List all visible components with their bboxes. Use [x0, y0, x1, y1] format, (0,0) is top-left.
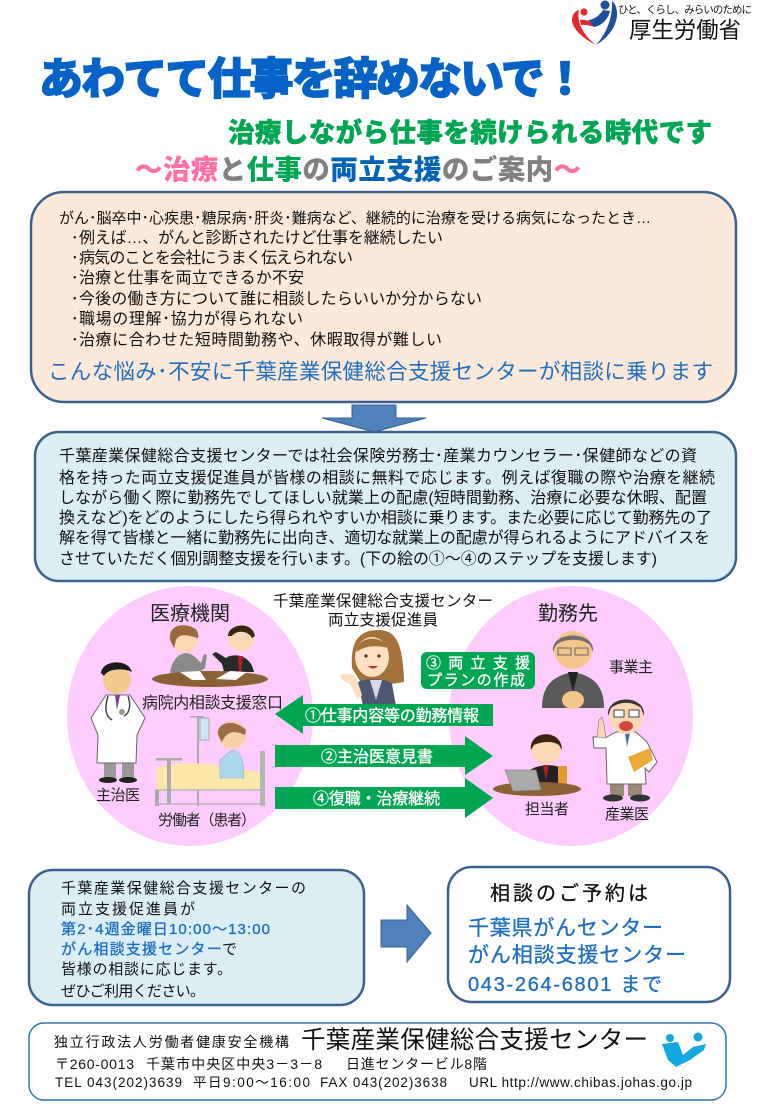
subtitle guide: 〜治療と仕事の両立支援のご案内〜 [135, 154, 581, 185]
worries list: ･ [71, 332, 79, 349]
panel: consultation schedule: がん相談支援センターで [61, 941, 237, 958]
box 3: plan creation: プランの作成 [427, 672, 525, 689]
footer organisation: 独立行政法人労働者健康安全機構 [54, 1034, 289, 1050]
panel: consultation schedule [29, 870, 364, 1005]
worries list: ･ [71, 311, 79, 328]
footer address: 千葉市中央区中央3－3－8 [146, 1056, 322, 1072]
illustration: staff at desk [493, 734, 581, 796]
panel: support description: 千葉産業保健総合支援センターでは社会保険労務士･産業カウンセラー･保健師などの資 [59, 447, 697, 465]
footer phone and url [55, 1075, 692, 1090]
illustration: employer [542, 631, 604, 709]
worries list: 治療と仕事を両立できるか不安 [79, 269, 304, 287]
worries list: ･ [71, 270, 79, 287]
worries list: ･ [71, 250, 79, 267]
worries conclusion: こんな悩み･不安に千葉産業保健総合支援センターが相談に乗ります [48, 360, 713, 384]
label: attending doctor: 主治医 [96, 787, 140, 804]
footer phone and url: TEL 043(202)3639 [55, 1075, 182, 1090]
panel: consultation schedule: ぜひご利用ください。 [61, 983, 205, 1000]
panel: support description: 換えなど)をどのようにしたら得られやすいか相談に乗ります。また必要に応じて勤務先の了 [59, 509, 712, 527]
illustration: occupational physician [593, 700, 657, 802]
panel: support description [35, 432, 736, 581]
arrow: right [381, 905, 431, 962]
footer center name: 千葉産業保健総合支援センター [301, 1026, 648, 1054]
worries intro: がん･脳卒中･心疾患･糖尿病･肝炎･難病など、継続的に治療を受ける病気になったとき… [59, 210, 651, 227]
worries list: ･ [71, 230, 79, 247]
subtitle green: 治療しながら仕事を続けられる時代です [228, 118, 712, 148]
footer phone and url: FAX 043(202)3638 [320, 1075, 447, 1090]
worries list: 職場の理解･協力が得られない [79, 310, 303, 328]
label: medical institution: 医療機関 [150, 602, 230, 625]
worries list [71, 229, 482, 349]
arrow: down [322, 405, 426, 432]
footer address: 〒260-0013 [55, 1056, 134, 1072]
title: あわてて仕事を辞めないで！ [39, 55, 587, 104]
worries list: ･ [71, 291, 79, 308]
circle: workplace [449, 586, 693, 846]
label: worker patient: 労働者（患者） [158, 812, 256, 829]
arrow 4: return to work [275, 778, 493, 818]
panel: consultation schedule: 第2･4週金曜日10:00～13:00 [61, 921, 270, 938]
panel: support description: 解を得て皆様と一緒に勤務先に出向き、適切な就業上の配慮が得られるようにアドバイスを [59, 529, 710, 547]
reservation contact: 千葉県がんセンター [468, 917, 663, 940]
reservation contact: がん相談支援センター [468, 944, 686, 967]
label: support promoter: 両立支援促進員 [328, 611, 438, 629]
icon: center logo [662, 1032, 706, 1067]
label: workplace: 勤務先 [538, 602, 598, 625]
footer phone and url: URL http://www.chibas.johas.go.jp [469, 1075, 692, 1090]
panel: worries [31, 192, 736, 402]
panel: reservation [448, 867, 730, 1002]
reservation heading: 相談のご予約は [490, 882, 648, 905]
label: support promoter: 千葉産業保健総合支援センター [273, 592, 493, 610]
label: support promoter [273, 592, 493, 629]
illustration: patient in bed [155, 716, 265, 806]
arrow 4: return to work: ④復職・治療継続 [313, 790, 440, 808]
header logo: ministry [572, 0, 752, 45]
panel: consultation schedule: 両立支援促進員が [61, 901, 195, 918]
footer address: 日進センタービル8階 [346, 1056, 487, 1072]
illustration: attending doctor [91, 662, 145, 783]
illustration: support promoter [340, 630, 404, 706]
arrow 2: doctor's opinion: ②主治医意見書 [321, 748, 433, 766]
label: hospital consultation window: 病院内相談支援窓口 [142, 694, 283, 712]
worries list: 今後の働き方について誰に相談したらいいか分からない [79, 290, 482, 308]
box 3: plan creation [421, 652, 535, 689]
box 3: plan creation: ③ 両 立 支 援 [426, 655, 530, 672]
panel: footer contact [29, 1023, 726, 1100]
worries list: 例えば…、がんと診断されたけど仕事を継続したい [79, 229, 443, 247]
worries list: 病気のことを会社にうまく伝えられない [79, 249, 353, 267]
worries list: 治療に合わせた短時間勤務や、休暇取得が難しい [79, 331, 442, 349]
footer address [55, 1056, 487, 1072]
reservation contact [468, 917, 686, 996]
panel: consultation schedule: 皆様の相談に応じます。 [61, 961, 232, 978]
label: employer: 事業主 [609, 659, 653, 676]
panel: support description: 格を持った両立支援促進員が皆様の相談に無料で応じます。例えば復職の際や治療を継続 [59, 469, 715, 487]
panel: consultation schedule: 千葉産業保健総合支援センターの [61, 880, 306, 897]
arrow 1: work information: ①仕事内容等の勤務情報 [305, 707, 479, 725]
label: person in charge: 担当者 [525, 801, 569, 818]
panel: support description: しながら働く際に勤務先でしてほしい就業上の配慮(短時間勤務、治療に必要な休暇、配置 [59, 489, 707, 507]
illustration: consultation desk [152, 625, 268, 687]
label: occupational physician: 産業医 [605, 806, 649, 823]
arrow 1: work information [275, 695, 493, 734]
logo tagline: ひと、くらし、みらいのために [618, 4, 752, 16]
footer phone and url: 平日9:00～16:00 [193, 1075, 310, 1090]
icon: ministry heart mark [572, 0, 617, 45]
logo name: 厚生労働省 [629, 18, 741, 43]
circle: medical institution [67, 586, 313, 846]
arrow 2: doctor's opinion [275, 736, 493, 775]
reservation contact: 043-264-6801 まで [468, 974, 662, 996]
panel: support description: させていただく個別調整支援を行います。(下の絵の①～④のステップを支援します) [59, 550, 657, 568]
